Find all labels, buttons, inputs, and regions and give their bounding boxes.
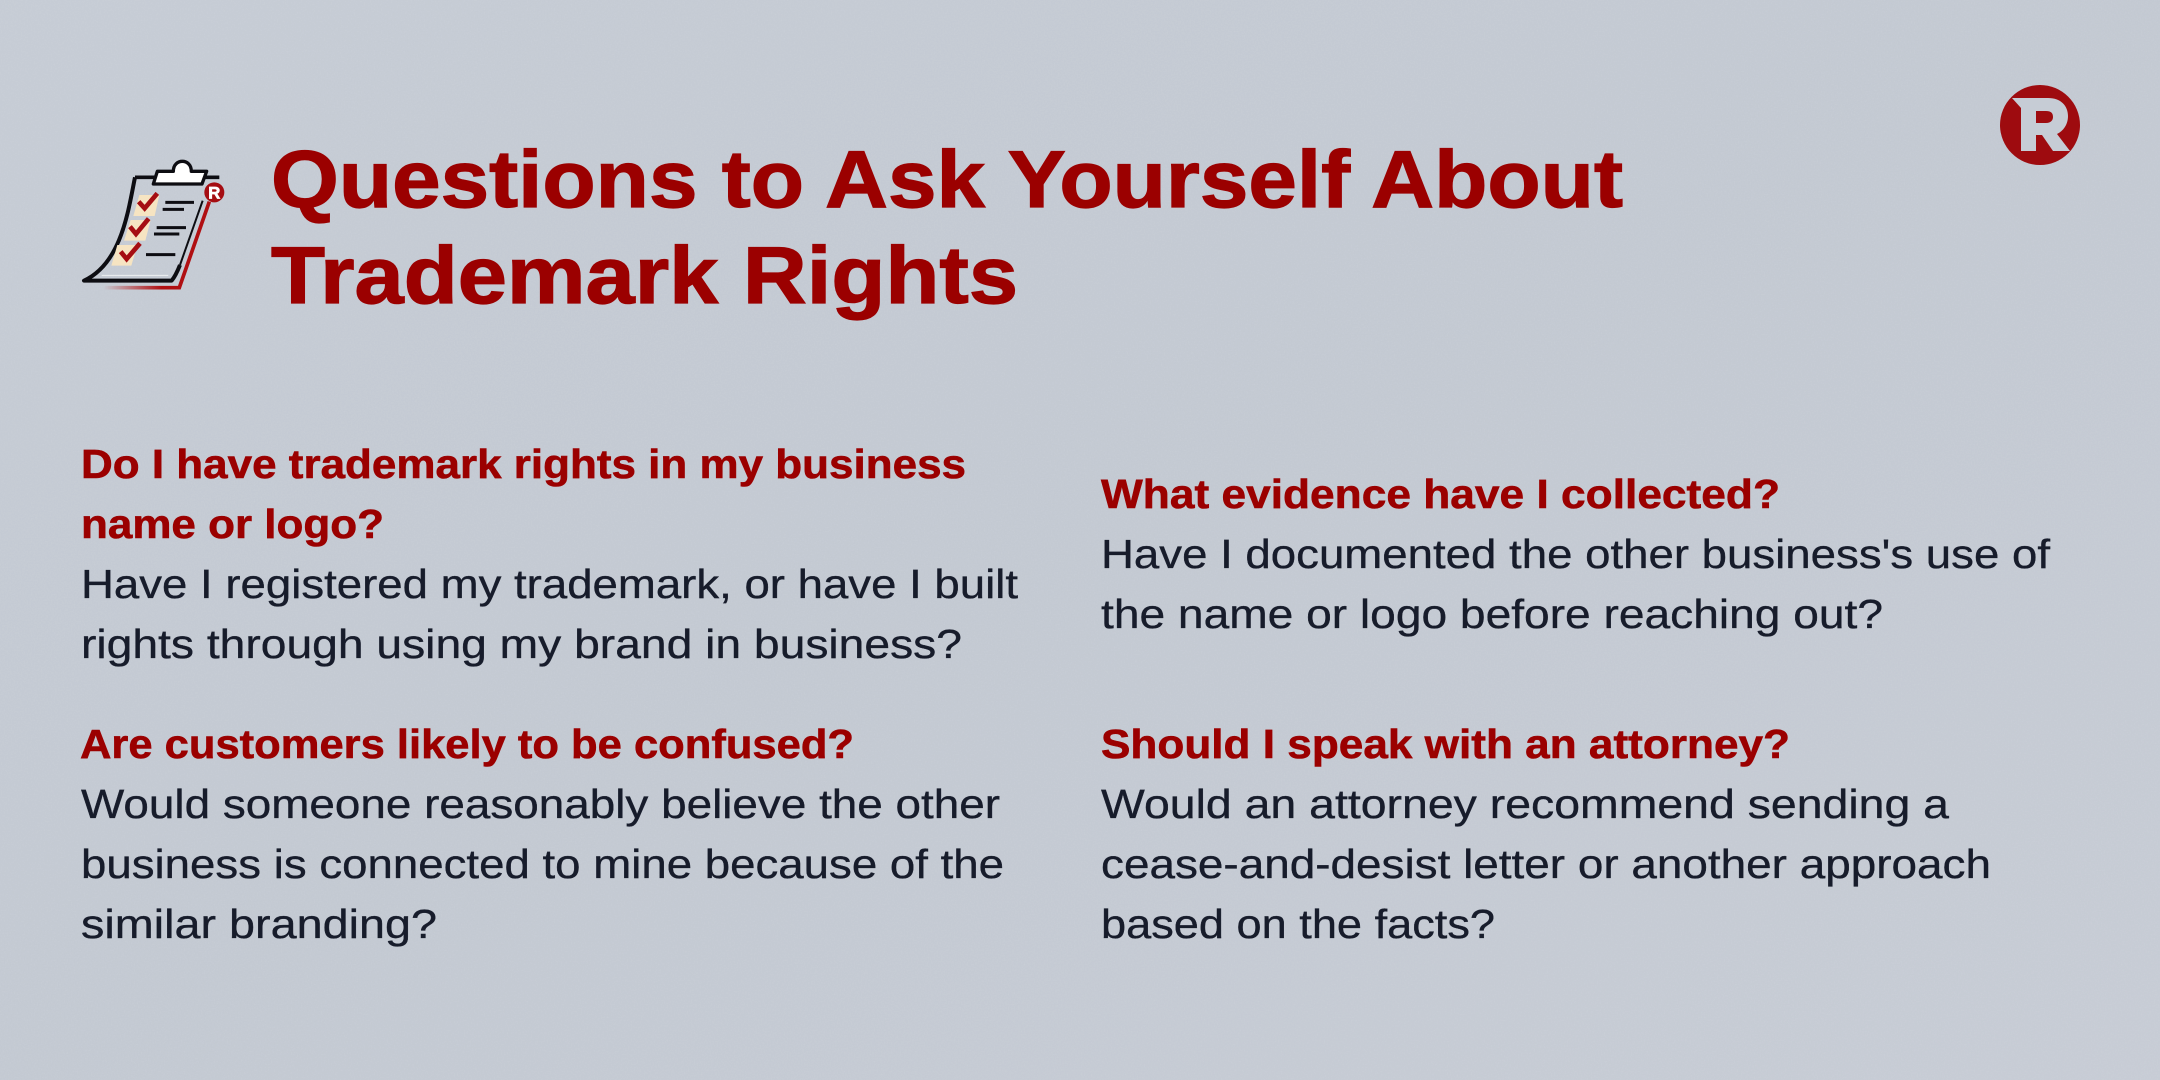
text block: attorney question: Should I speak with an attorney?: [1101, 721, 1790, 767]
icon: small R badge: [204, 182, 224, 202]
text block: attorney question: [1101, 721, 1991, 947]
title: [271, 135, 1623, 321]
text block: attorney question: Would an attorney recommend sending a: [1101, 781, 1949, 827]
text block: evidence question: [1101, 471, 2051, 637]
title: Trademark Rights: [271, 231, 1018, 321]
text block: evidence question: Have I documented the other business's use of: [1101, 531, 2051, 577]
text block: customer confusion question: Would someone reasonably believe the other: [81, 781, 1000, 827]
text block: attorney question: cease-and-desist letter or another approach: [1101, 841, 1991, 887]
text block: evidence question: What evidence have I collected?: [1101, 471, 1780, 517]
text block: trademark rights question: Do I have trademark rights in my business: [81, 441, 966, 487]
text block: customer confusion question: Are customers likely to be confused?: [80, 721, 854, 767]
text block: trademark rights question: name or logo?: [81, 501, 384, 547]
logo: R badge: [2000, 85, 2080, 165]
icon: clipboard clip: [153, 161, 207, 184]
icon: clipboard checklist: [84, 161, 224, 288]
text block: evidence question: the name or logo before reaching out?: [1101, 591, 1883, 637]
text block: customer confusion question: [80, 721, 1004, 947]
text block: trademark rights question: Have I registered my trademark, or have I built: [81, 561, 1019, 607]
text block: customer confusion question: business is connected to mine because of the: [81, 841, 1004, 887]
text block: attorney question: based on the facts?: [1101, 901, 1495, 947]
text block: trademark rights question: rights through using my brand in business?: [81, 621, 962, 667]
icon: checklist rows: [111, 193, 194, 266]
text block: trademark rights question: [81, 441, 1019, 667]
title: Questions to Ask Yourself About: [271, 135, 1623, 225]
icon: small R badge: R: [208, 183, 220, 202]
text block: customer confusion question: similar branding?: [81, 901, 437, 947]
